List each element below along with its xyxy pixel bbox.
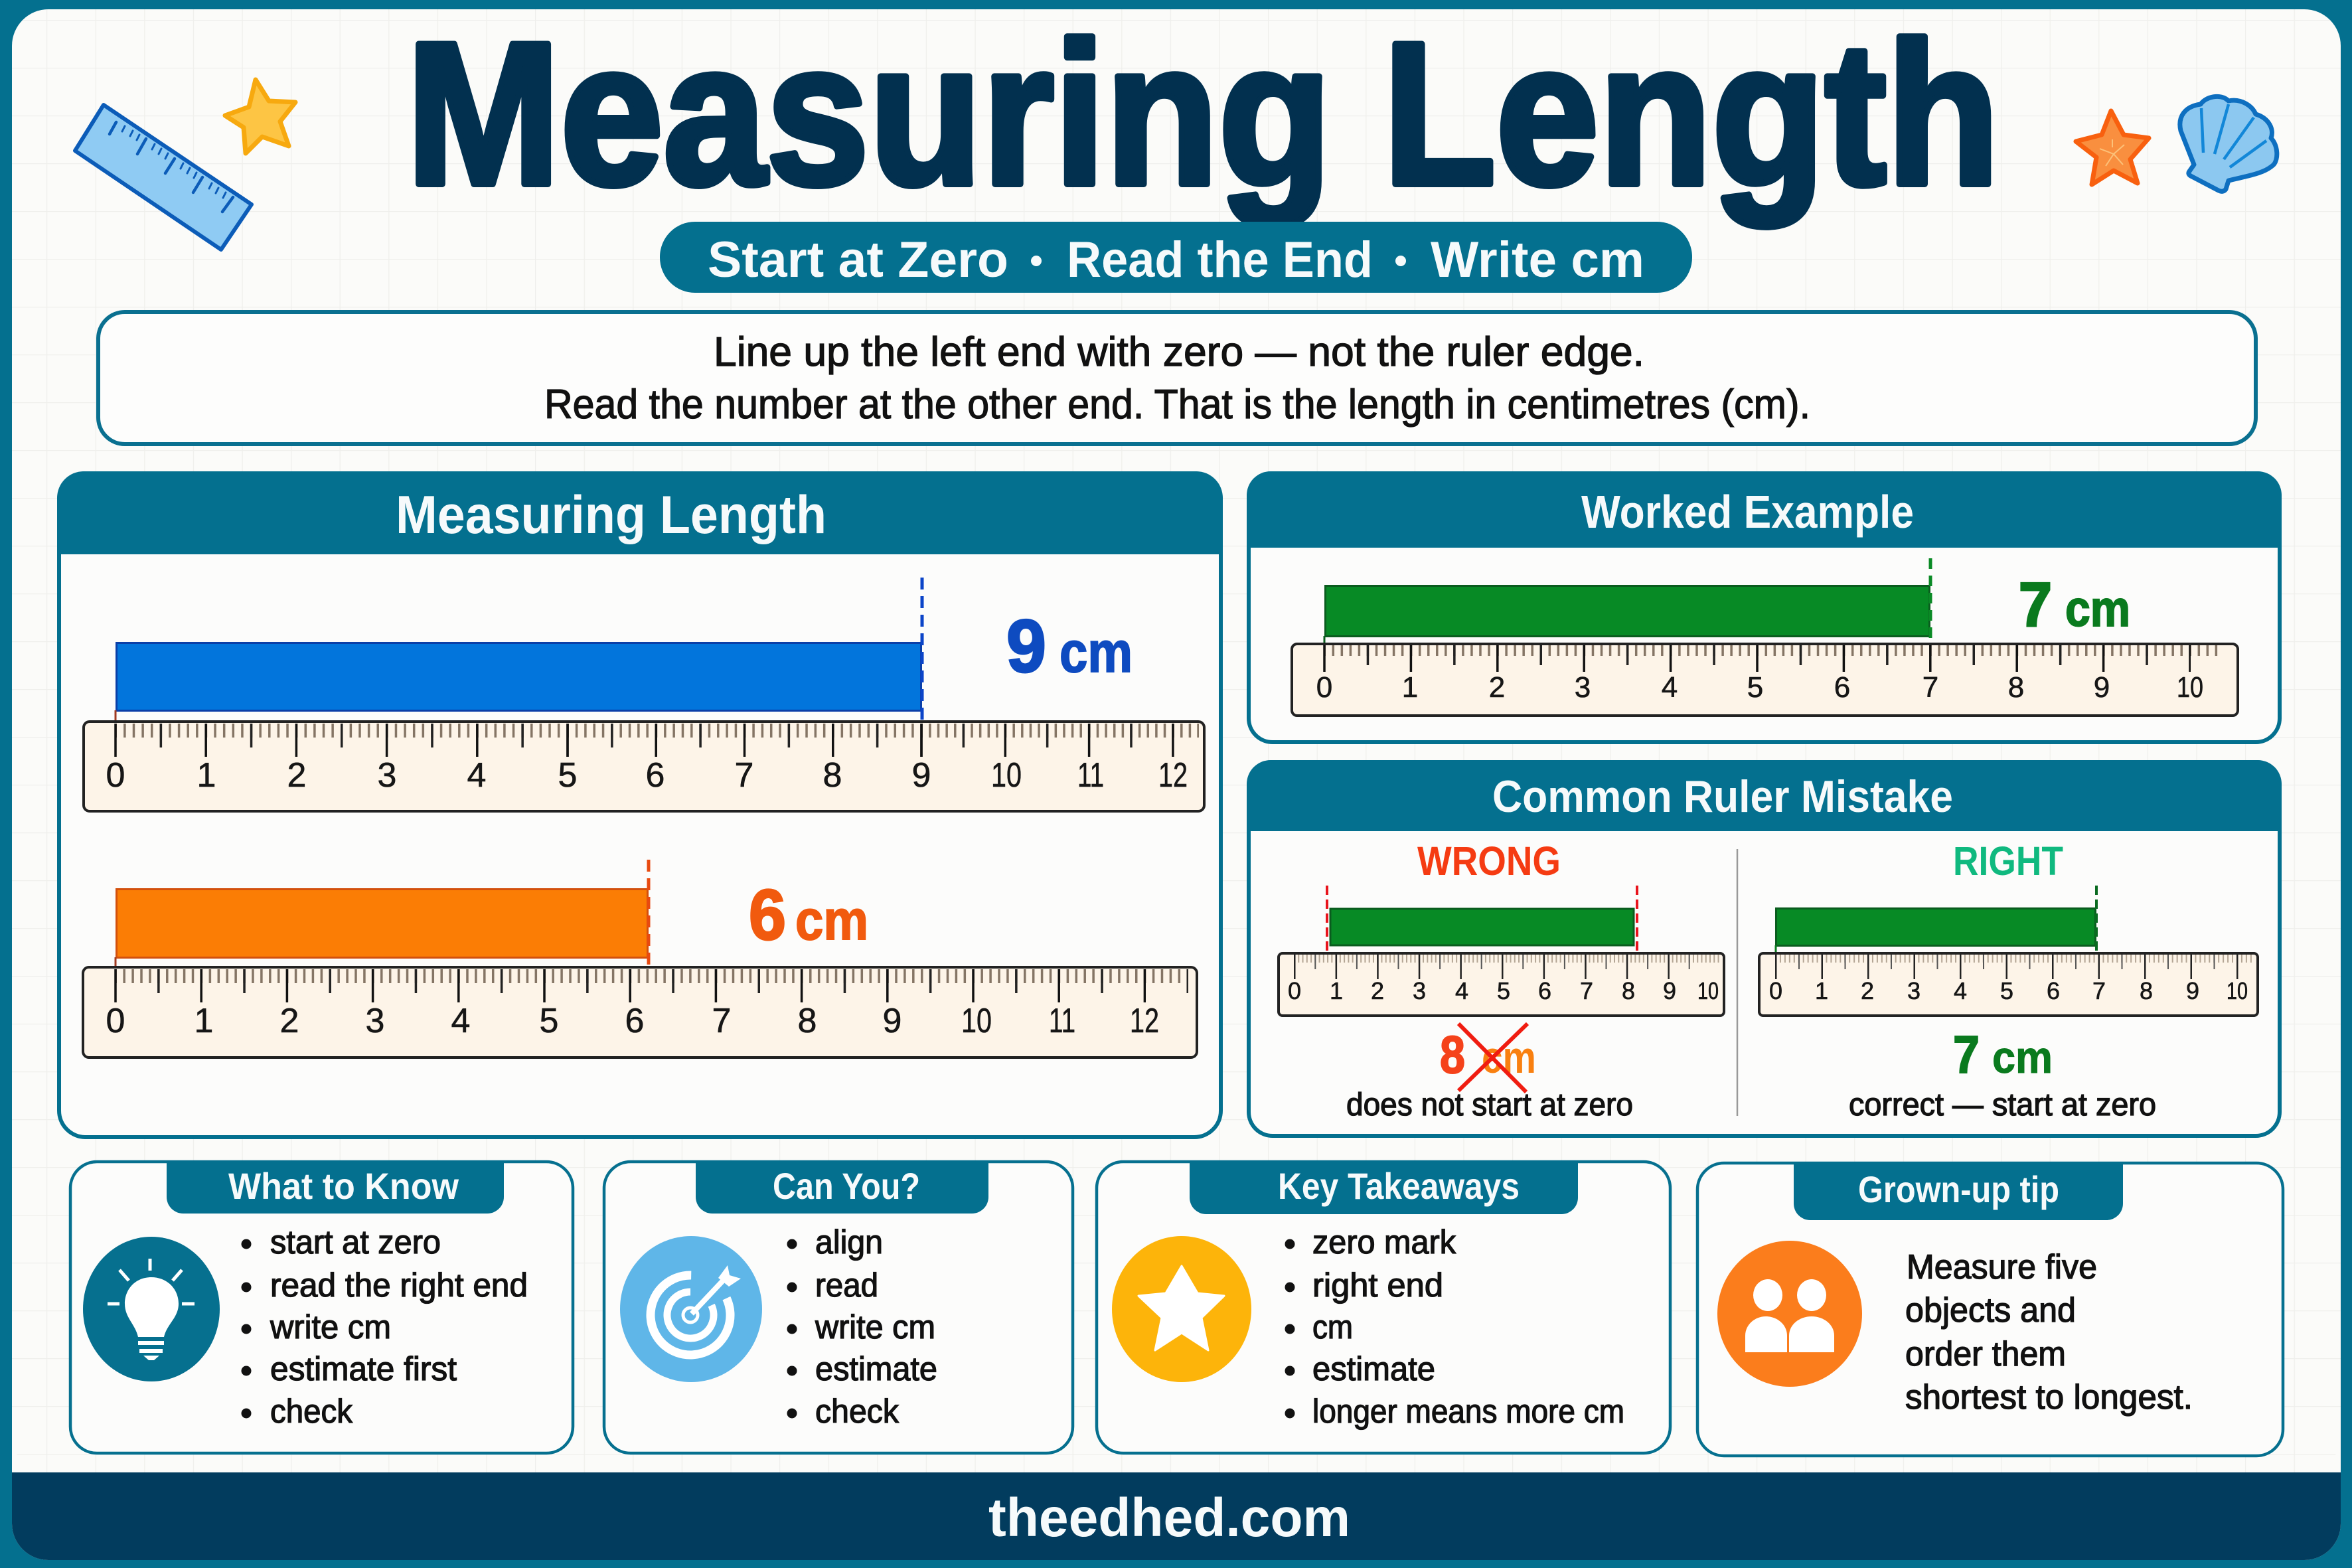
card tab	[1794, 1162, 2123, 1220]
card heading: Key Takeaways	[1278, 1165, 1520, 1207]
wrong ruler: 3	[1413, 977, 1426, 1004]
bullet list: write cm	[270, 1308, 391, 1346]
right ruler	[1759, 953, 2258, 1016]
right value: cm	[1992, 1032, 2053, 1083]
label 7 cm: 7	[2019, 570, 2052, 639]
label 9 cm: 9	[1006, 605, 1046, 688]
right caption: correct — start at zero	[1849, 1087, 2156, 1123]
bullet list: check	[815, 1393, 900, 1430]
label 6 cm	[749, 874, 868, 955]
bullet list	[787, 1223, 937, 1430]
title: Measuring Length	[406, 0, 1999, 228]
card tab	[696, 1161, 988, 1214]
bullet list: estimate first	[270, 1350, 457, 1387]
right ruler: 0	[1769, 977, 1782, 1004]
card heading: Grown-up tip	[1858, 1168, 2059, 1210]
wrong caption: does not start at zero	[1346, 1087, 1633, 1123]
bullet list	[1285, 1223, 1624, 1430]
wrong heading: WRONG	[1417, 838, 1561, 884]
wrong ruler	[1279, 953, 1724, 1016]
tip text: Measure five	[1907, 1248, 2097, 1287]
ruler 1	[84, 722, 1204, 811]
ruler 1: 11	[1077, 756, 1104, 795]
right value	[1953, 1025, 2053, 1084]
tip text: objects and	[1905, 1291, 2076, 1330]
icon: star	[1112, 1236, 1251, 1382]
icon: light bulb	[83, 1237, 220, 1381]
ruler 2: 0	[106, 1002, 125, 1040]
icon: blue ruler	[75, 105, 252, 250]
bullet list: read	[815, 1267, 878, 1304]
intro line 2: Read the number at the other end. That is the length in centimetres (cm).	[544, 382, 1810, 428]
tip text: order them	[1905, 1335, 2066, 1373]
footer url: theedhed.com	[988, 1488, 1350, 1548]
label 7 cm: cm	[2065, 581, 2130, 637]
ruler 2: 3	[366, 1002, 384, 1040]
worked ruler	[1292, 644, 2238, 716]
icon: people	[1717, 1241, 1862, 1387]
panel heading: Worked Example	[1581, 486, 1914, 538]
divider	[1737, 849, 1738, 1116]
label 6 cm: cm	[795, 889, 868, 951]
right ruler: 3	[1907, 977, 1921, 1004]
icon: sea shell	[2180, 96, 2277, 191]
wrong ruler: 9	[1663, 977, 1676, 1004]
right ruler: 6	[2047, 977, 2060, 1004]
bullet list: check	[270, 1393, 353, 1430]
ruler 1: 7	[735, 756, 753, 795]
bullet list: write cm	[815, 1308, 935, 1346]
tip text	[1905, 1248, 2193, 1417]
card tab	[1190, 1161, 1578, 1214]
ruler 2	[83, 967, 1197, 1058]
wrong ruler: 8	[1622, 977, 1635, 1004]
ruler 1: 12	[1158, 756, 1188, 795]
wrong value crossed out: 8	[1440, 1025, 1465, 1084]
ruler 2: 1	[195, 1002, 213, 1040]
ruler 1: 2	[287, 756, 306, 795]
orange bar 6 cm	[116, 860, 649, 969]
footer band	[12, 1472, 2341, 1560]
ruler 1: 9	[912, 756, 931, 795]
ruler 2: 6	[625, 1002, 644, 1040]
icon: gold star	[225, 80, 295, 153]
card: grown-up tip	[1697, 1162, 2283, 1456]
label 9 cm: cm	[1059, 621, 1133, 684]
label 6 cm: 6	[749, 874, 786, 955]
bullet list: right end	[1312, 1267, 1443, 1304]
wrong ruler: 5	[1497, 977, 1510, 1004]
card heading: Can You?	[773, 1165, 920, 1207]
card: what to know	[70, 1161, 573, 1453]
worked ruler: 10	[2177, 671, 2203, 704]
wrong ruler: 2	[1371, 977, 1384, 1004]
intro box	[98, 312, 2256, 444]
right bar	[1776, 886, 2096, 954]
wrong ruler: 0	[1288, 977, 1301, 1004]
worked ruler: 4	[1662, 671, 1678, 704]
worked ruler: 3	[1575, 671, 1591, 704]
right ruler: 9	[2186, 977, 2199, 1004]
subtitle pill: Write cm	[1431, 232, 1644, 288]
ruler 1: 1	[197, 756, 216, 795]
ruler 2: 2	[280, 1002, 299, 1040]
wrong ruler: 4	[1455, 977, 1468, 1004]
blue bar 9 cm	[116, 578, 922, 724]
bullet list: start at zero	[270, 1223, 441, 1261]
panel: measuring length	[57, 471, 1223, 1137]
green bar 7 cm	[1324, 558, 1930, 646]
right ruler: 8	[2140, 977, 2153, 1004]
icon: orange starfish	[2076, 111, 2149, 185]
ruler 1: 10	[991, 756, 1022, 795]
ruler 2: 12	[1130, 1002, 1159, 1040]
ruler 2: 5	[540, 1002, 558, 1040]
right ruler: 5	[2000, 977, 2013, 1004]
ruler 1: 5	[558, 756, 577, 795]
worked ruler: 8	[2008, 671, 2024, 704]
wrong bar	[1327, 886, 1637, 954]
worked ruler: 1	[1402, 671, 1418, 704]
bullet list: estimate	[1312, 1350, 1435, 1387]
worked ruler: 7	[1922, 671, 1938, 704]
ruler 2: 10	[961, 1002, 992, 1040]
right ruler: 7	[2092, 977, 2106, 1004]
subtitle pill	[660, 222, 1692, 293]
ruler 2: 9	[883, 1002, 902, 1040]
ruler 1: 6	[646, 756, 665, 795]
wrong ruler: 7	[1580, 977, 1593, 1004]
card: can you	[604, 1161, 1073, 1453]
ruler 1: 8	[823, 756, 842, 795]
right ruler: 4	[1954, 977, 1967, 1004]
subtitle pill: Read the End	[1067, 232, 1373, 288]
tip text: shortest to longest.	[1905, 1378, 2193, 1417]
worked ruler: 5	[1747, 671, 1763, 704]
right ruler: 2	[1861, 977, 1874, 1004]
right heading: RIGHT	[1953, 838, 2063, 884]
worked ruler: 0	[1316, 671, 1332, 704]
ruler 1: 4	[467, 756, 486, 795]
ruler 2: 4	[451, 1002, 470, 1040]
wrong value crossed out: cm	[1482, 1032, 1536, 1083]
wrong value crossed out	[1440, 1024, 1536, 1092]
card tab	[167, 1161, 504, 1214]
wrong ruler: 1	[1330, 977, 1343, 1004]
right ruler: 1	[1815, 977, 1828, 1004]
label 9 cm	[1006, 605, 1133, 688]
bullet list: zero mark	[1312, 1223, 1456, 1261]
panel: worked example	[1247, 471, 2282, 742]
wrong ruler: 6	[1538, 977, 1551, 1004]
worked ruler: 9	[2094, 671, 2110, 704]
label 7 cm	[2019, 570, 2130, 639]
right value: 7	[1953, 1025, 1980, 1084]
subtitle pill: Start at Zero	[708, 232, 1008, 288]
worked ruler: 2	[1489, 671, 1505, 704]
wrong ruler: 10	[1697, 977, 1719, 1004]
right ruler: 10	[2227, 977, 2248, 1004]
ruler 1: 0	[106, 756, 125, 795]
bullet list: longer means more cm	[1312, 1393, 1624, 1430]
panel: common ruler mistake	[1247, 760, 2282, 1136]
bullet list: estimate	[815, 1350, 937, 1387]
icon: target	[620, 1236, 762, 1382]
ruler 1: 3	[378, 756, 396, 795]
bullet list: read the right end	[270, 1267, 528, 1304]
panel heading: Common Ruler Mistake	[1492, 771, 1953, 822]
bullet list: cm	[1312, 1308, 1353, 1346]
worked ruler: 6	[1834, 671, 1850, 704]
ruler 2: 8	[798, 1002, 817, 1040]
ruler 2: 11	[1049, 1002, 1075, 1040]
bullet list: align	[815, 1223, 883, 1261]
card: key takeaways	[1097, 1161, 1670, 1453]
intro line 1: Line up the left end with zero — not the ruler edge.	[714, 329, 1644, 375]
card heading: What to Know	[228, 1165, 459, 1207]
bullet list	[242, 1223, 528, 1430]
panel heading: Measuring Length	[396, 485, 826, 545]
ruler 2: 7	[712, 1002, 731, 1040]
